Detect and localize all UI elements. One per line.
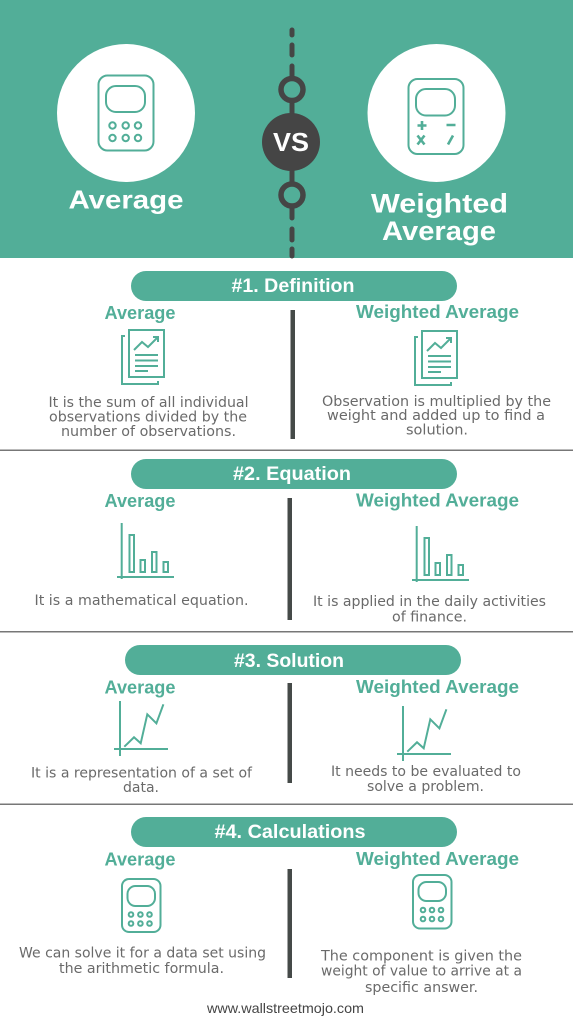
icon: calculator left: [122, 879, 160, 932]
text: weighted average calculations: The component is given the: [320, 948, 522, 964]
icon: calculator right: [413, 875, 452, 928]
heading: Weighted Average: [371, 188, 508, 246]
text: average equation: It is a mathematical equation.: [34, 593, 248, 609]
vs divider with rings: [262, 30, 320, 256]
text: weighted average solution: [331, 764, 521, 795]
text: average calculations: We can solve it for a data set using: [19, 946, 266, 962]
icon: bar chart left: [117, 523, 174, 579]
text: average definition: observations divided by the: [49, 410, 247, 426]
text: weighted average definition: weight and added up to find a: [327, 408, 545, 424]
label: weighted average: Weighted Average: [356, 849, 519, 869]
text: weighted average equation: [313, 594, 546, 626]
text: weighted average calculations: specific answer.: [365, 980, 478, 996]
heading: Weighted Average: Average: [382, 216, 496, 246]
label: weighted average: Weighted Average: [356, 677, 519, 697]
heading pill: definition: #1. Definition: [232, 276, 354, 297]
icon: line chart right: [397, 706, 451, 761]
icon: bar chart right: [412, 526, 469, 582]
heading: Weighted Average: Weighted: [371, 188, 508, 218]
panel: definition: [48, 271, 551, 440]
heading pill: equation: #2. Equation: [233, 464, 351, 485]
text: average solution: [31, 766, 253, 796]
text: weighted average solution: solve a problem.: [367, 779, 484, 795]
text: average calculations: the arithmetic formula.: [59, 961, 224, 977]
text: weighted average definition: [322, 394, 551, 438]
footer: website: www.wallstreetmojo.com: [206, 1000, 364, 1016]
heading pill: definition: [131, 271, 457, 301]
heading pill: solution: #3. Solution: [234, 651, 344, 672]
panel: header: [0, 0, 573, 258]
text: weighted average solution: It needs to be evaluated to: [331, 764, 521, 780]
text: weighted average equation: of finance.: [392, 610, 467, 626]
icon: right white circle with operator calculator: [368, 44, 506, 182]
vs divider with rings: VS: [273, 127, 309, 157]
heading pill: equation: [131, 459, 457, 489]
label: average: Average: [104, 678, 176, 698]
label: weighted average: Weighted Average: [356, 490, 519, 510]
label: average: Average: [104, 491, 176, 511]
text: average definition: [48, 395, 248, 440]
icon: report left: [122, 330, 164, 384]
label: average: Average: [104, 850, 176, 870]
text: average solution: It is a representation of a set of: [31, 766, 253, 782]
panel: calculations: [19, 817, 522, 996]
label: average: Average: [104, 303, 176, 323]
text: weighted average equation: It is applied in the daily activities: [313, 594, 546, 610]
icon: line chart left: [114, 701, 168, 756]
heading pill: calculations: [131, 817, 457, 847]
text: weighted average calculations: weight of value to arrive at a: [321, 964, 522, 980]
heading pill: solution: [125, 645, 461, 675]
icon: left white circle with calculator: [57, 44, 195, 182]
heading pill: calculations: #4. Calculations: [214, 822, 366, 843]
label: weighted average: Weighted Average: [356, 302, 519, 322]
text: average solution: data.: [123, 780, 159, 796]
icon: report right: [415, 331, 457, 385]
text: weighted average definition: Observation is multiplied by the: [322, 394, 551, 410]
text: weighted average definition: solution.: [406, 422, 468, 438]
text: average definition: number of observations.: [61, 424, 236, 440]
text: average definition: It is the sum of all individual: [48, 395, 248, 411]
panel: solution: [31, 645, 521, 796]
text: average calculations: [19, 946, 266, 977]
panel: equation: [34, 459, 546, 626]
text: weighted average calculations: [320, 948, 522, 996]
heading: Average: Average: [68, 184, 184, 214]
